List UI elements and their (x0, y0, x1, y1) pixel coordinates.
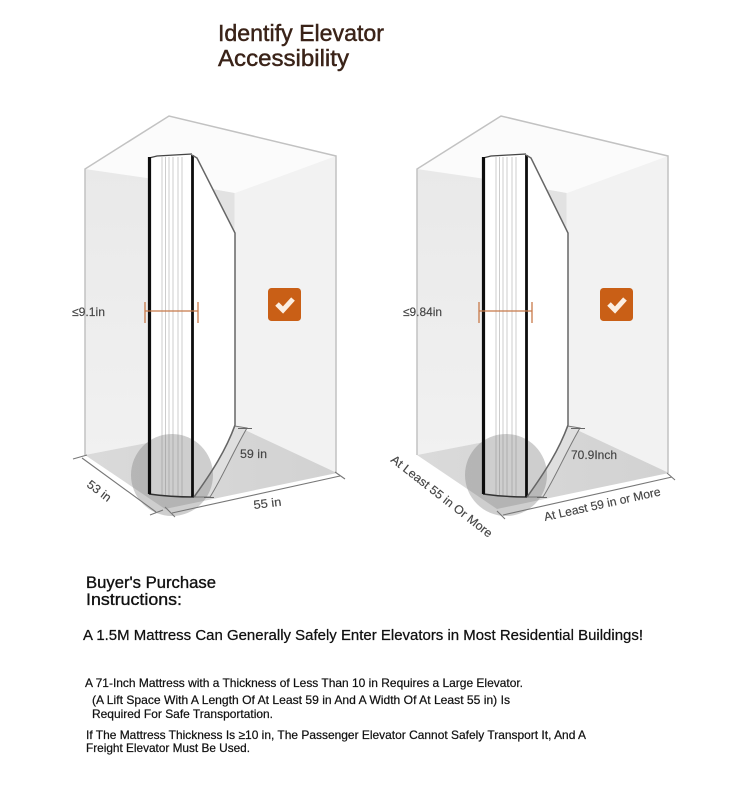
dimension: depth 59 in: 59 in (240, 447, 267, 461)
text: main statement: A 1.5M Mattress Can Generally Safely Enter Elevators in Most Residential Buildings! (83, 628, 643, 644)
dimension: depth 70.9 inch: 70.9Inch (571, 448, 617, 462)
heading: buyer's purchase instructions: Instructions: (86, 591, 182, 609)
icon: check badge (600, 288, 633, 321)
elevator box (417, 116, 669, 509)
text: large elevator requirement: Required For Safe Transportation. (92, 707, 273, 721)
text: freight elevator note: If The Mattress Thickness Is ≥10 in, The Passenger Elevator Cannot Safely Transport It, And A (86, 728, 586, 742)
panel: standard elevator diagram (72, 116, 345, 517)
mattress (150, 155, 247, 497)
highlight circle (465, 434, 547, 516)
heading: buyer's purchase instructions: Buyer's Purchase (86, 574, 216, 592)
dimension: width 53 in (73, 455, 163, 515)
dimension: width at least 55 in: At Least 55 in Or More (388, 452, 496, 541)
highlight circle (131, 434, 213, 516)
dimension: thickness (72, 302, 198, 323)
mattress outline (149, 154, 235, 497)
elevator box (85, 116, 337, 509)
dimension: width 53 in: 53 in (84, 477, 114, 505)
text: large elevator requirement: (A Lift Space With A Length Of At Least 59 in And A Width Of At Least 55 in) Is (92, 693, 510, 707)
heading: buyer's purchase instructions (86, 574, 216, 609)
text: freight elevator note (86, 728, 586, 755)
text: freight elevator note: Freight Elevator Must Be Used. (86, 741, 250, 755)
dimension: length 55 in: 55 in (253, 495, 282, 512)
title: Identify Elevator (218, 20, 384, 46)
text: large elevator requirement (85, 676, 523, 721)
dimension: depth 70.9 inch (537, 428, 617, 498)
dimension: length at least 59 in (497, 473, 675, 524)
dimension: depth 59 in (204, 428, 267, 498)
icon: check badge (268, 288, 301, 321)
text: large elevator requirement: A 71-Inch Mattress with a Thickness of Less Than 10 in Requires a Large Elevator. (85, 676, 523, 690)
title: Accessibility (218, 45, 350, 71)
mattress outline (483, 154, 568, 497)
dimension: length 55 in (165, 472, 345, 517)
panel: large elevator diagram (388, 116, 675, 541)
dimension: thickness: ≤9.1in (72, 305, 105, 319)
dimension: length at least 59 in: At Least 59 in or More (543, 484, 662, 524)
dimension: thickness: ≤9.84in (403, 305, 442, 319)
mattress (484, 155, 580, 497)
title (218, 20, 384, 71)
dimension: thickness (403, 302, 532, 323)
